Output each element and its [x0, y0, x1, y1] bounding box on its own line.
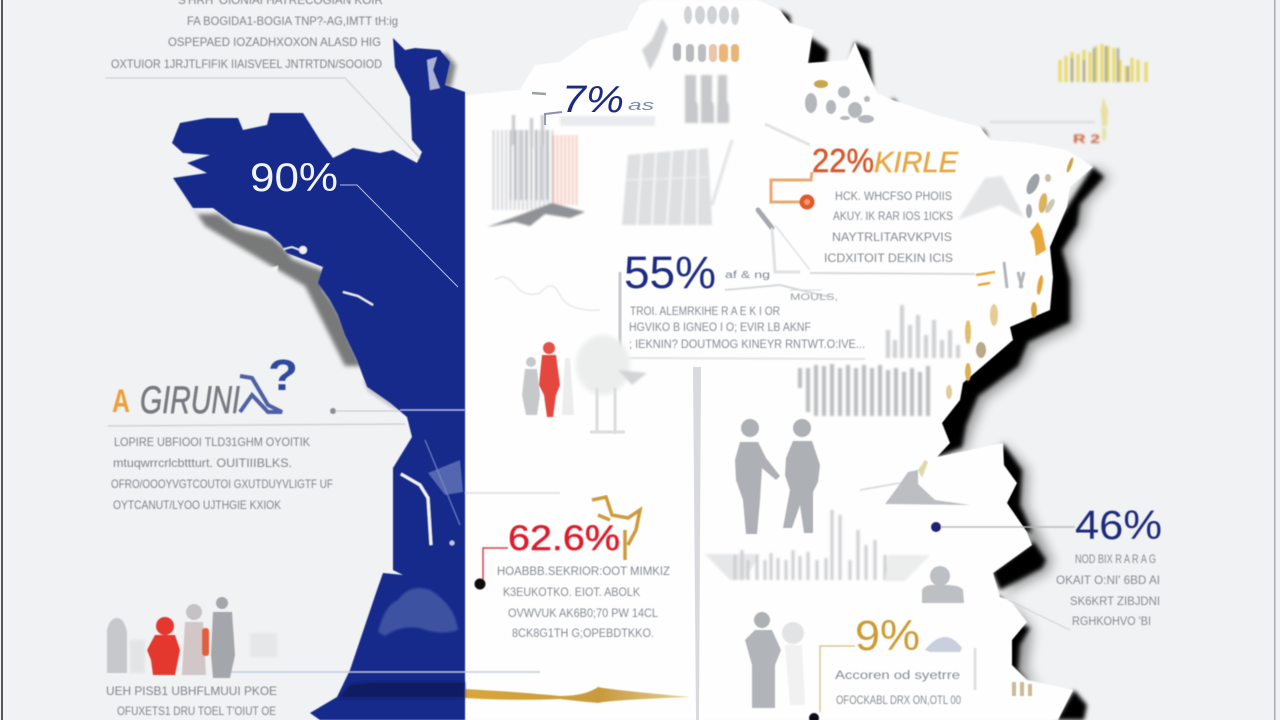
callout: 46%: 46% — [1075, 502, 1162, 548]
callout: 9% gold: Accoren od syetrre — [835, 670, 960, 682]
icons: gold specks along east border — [946, 157, 1075, 696]
mini bar chart: top right: R 2 — [1073, 132, 1100, 146]
chart: grey skyline bars upper — [800, 305, 958, 416]
heading: left block with question mark — [108, 351, 465, 426]
callout: 55%: ; IEKNIN? DOUTMOG KINEYR RNTWT.O:IVE... — [629, 339, 865, 351]
heading: left block with question mark: GIRUNI — [140, 379, 240, 422]
text block: left paragraph: OFRO/OOOYVGTCOUTOI GXUTDUYVLIGTF UF — [111, 477, 333, 491]
callout: 46%: NOD BIX R A R A G — [1075, 554, 1156, 566]
callout: 55%: af & ng — [725, 270, 770, 281]
callout: 55%: HGVIKO B IGNEO I O; EVIR LB AKNF — [629, 322, 811, 334]
gold streak — [465, 493, 690, 703]
label: 73% with building chart: as — [628, 97, 655, 114]
icons: ovals and bottles column — [642, 6, 739, 123]
callout: 55%: TROI. ALEMRKIHE R A E K I OR — [630, 306, 780, 318]
text block: top left: OSPEPAED IOZADHXOXON ALASD HIG — [168, 35, 381, 49]
text block: left paragraph: OYTCANUT/LYOO UJTHGIE KXIOK — [113, 498, 281, 512]
text block: top left: OXTUIOR 1JRJTLFIFIK IIAISVEEL JNTRTDN/SOOIOD — [111, 57, 382, 71]
chart: vertical line building — [487, 115, 585, 227]
heading: left block with question mark: ? — [268, 351, 298, 400]
text block: bottom left caption: UEH PISB1 UBHFLMUUI PKOE — [106, 684, 277, 698]
chart: solar panel stripes — [622, 140, 732, 225]
map: white eastern half — [465, 0, 1093, 720]
callout: red percentage — [474, 497, 670, 640]
label: 90% on blue region — [250, 156, 458, 287]
callout: orange heading with text: HCK. WHCFSO PHOIIS — [835, 191, 952, 203]
icon: man and woman — [745, 612, 805, 708]
label: 90% on blue region: 90% — [250, 156, 338, 200]
heading: left block with question mark: A — [112, 383, 130, 419]
text block: bottom left caption — [106, 684, 277, 718]
icon: people group bottom left — [107, 597, 277, 678]
mini bar chart: top right — [990, 44, 1146, 146]
text block: top left — [105, 0, 420, 158]
callout: 46%: SK6KRT ZIBJDNI — [1070, 596, 1160, 608]
callout: 46% — [931, 502, 1162, 630]
text block: left paragraph: LOPIRE UBFIOOI TLD31GHM OYOITIK — [114, 435, 310, 449]
icon: kneeling person — [860, 460, 970, 505]
divider bar — [693, 367, 701, 720]
label: 73% with building chart: 7% — [562, 79, 624, 121]
callout: 55%: MOULS, — [790, 292, 838, 303]
east border shadow of the map — [780, 10, 1110, 720]
callout: red percentage: 62.6% — [508, 519, 620, 558]
icon: red person group and bird — [495, 277, 647, 434]
callout: orange heading with text: 22% — [812, 142, 874, 179]
callout: red percentage: 8CK8G1TH G;OPEBDTKKO. — [512, 628, 654, 640]
callout: 55% — [611, 247, 865, 369]
callout: 55%: 55% — [624, 247, 716, 298]
callout: orange heading with text — [758, 124, 1024, 274]
callout: orange heading with text: KIRLE — [874, 147, 959, 179]
text block: left paragraph: mtuqwrrcrlcbttturt. OUITIIIBLKS. — [113, 456, 292, 470]
map: blue western half — [172, 38, 465, 720]
text block: top left: FA BOGIDA1-BOGIA TNP?-AG,IMTT tH:ig — [187, 14, 398, 28]
icon: blue hat shape and details — [230, 440, 540, 698]
callout: 9% gold: 9% — [855, 612, 920, 660]
callout: red percentage: K3EUKOTKO. EIOT. ABOLK — [503, 587, 640, 599]
callout: orange heading with text: NAYTRLITARVKPVIS — [832, 232, 952, 244]
icon: two men shaking hands — [735, 419, 820, 534]
text block: bottom left caption: OFUXETS1 DRU TOEL T'OIUT OE — [117, 704, 276, 718]
callout: orange heading with text: AKUY. IK RAR IOS 1ICKS — [833, 211, 953, 223]
callout: 9% gold: OFOCKABL DRX ON,OTL 00 — [836, 695, 961, 707]
icon: stones — [805, 80, 874, 123]
skyline chart — [705, 510, 930, 581]
callout: 9% gold — [809, 612, 975, 720]
callout: orange heading with text: ICDXITOIT DEKIN ICIS — [824, 253, 953, 265]
text block: left paragraph — [111, 435, 333, 512]
callout: red percentage: OVWVUK AK6B0;70 PW 14CL — [508, 608, 659, 620]
icon: bust — [922, 566, 964, 603]
callout: 46%: OKAIT O:NI' 6BD AI — [1056, 575, 1160, 587]
label: 73% with building chart — [532, 79, 655, 126]
callout: red percentage: HOABBB.SEKRIOR:OOT MIMKIZ — [497, 566, 670, 578]
callout: 46%: RGHKOHVO 'BI — [1072, 616, 1151, 628]
